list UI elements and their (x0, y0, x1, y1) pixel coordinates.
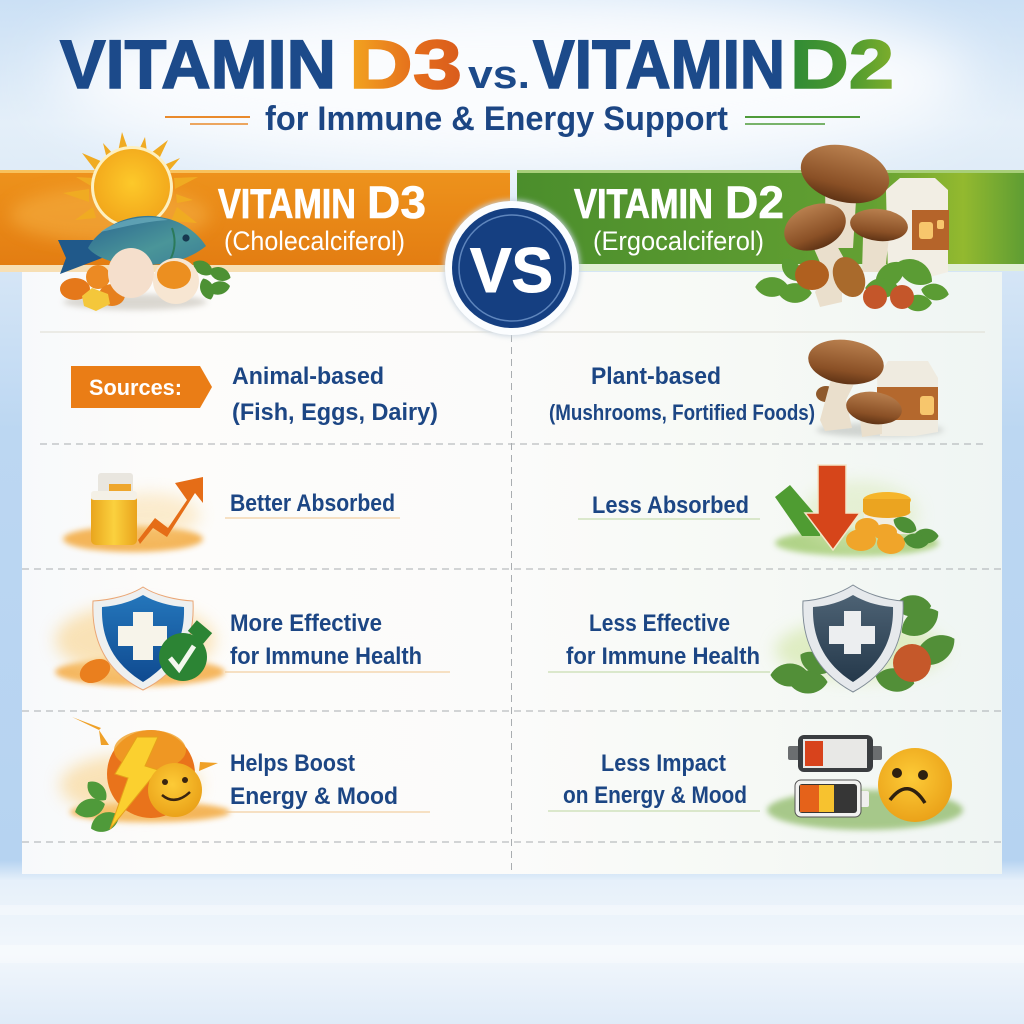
icon: mushrooms and bottle (805, 335, 944, 437)
heading: vitamin D2: VITAMIN (574, 180, 713, 227)
heading: vitamin D3 (218, 177, 426, 256)
icon: grey shield with leaves (770, 585, 961, 695)
sources tag: Sources: (89, 375, 182, 400)
panel: comparison table (22, 272, 1002, 874)
text: helps boost: Helps Boost (230, 750, 355, 777)
heading: vitamin D3: VITAMIN (218, 180, 356, 227)
icon: fish, eggs and leaves (58, 216, 233, 311)
text: more effective: More Effective (230, 610, 382, 637)
heading: vitamin D2 (574, 177, 784, 256)
text: D3 sources: (Fish, Eggs, Dairy) (232, 399, 438, 426)
text: less effective (548, 610, 770, 672)
heading: vitamin D3: (Cholecalciferol) (224, 226, 405, 256)
banner: vitamin D2 (517, 170, 1024, 271)
heading: vitamin D2: (Ergocalciferol) (593, 226, 764, 256)
text: helps boost: Energy & Mood (230, 783, 398, 810)
icon: sun (63, 132, 198, 228)
vs badge: VS (470, 236, 553, 306)
title: vs. (468, 53, 530, 97)
text: D2 sources: (Mushrooms, Fortified Foods) (549, 400, 815, 425)
text: less effective: for Immune Health (566, 643, 760, 670)
icon: bottle with rising arrow (63, 473, 203, 552)
text: D2 sources (549, 363, 815, 425)
subtitle: for Immune & Energy Support (265, 100, 728, 138)
text: less impact: Less Impact (601, 750, 726, 777)
vs badge (444, 200, 580, 336)
text: more effective: for Immune Health (230, 643, 422, 670)
heading: vitamin D2: D2 (725, 177, 784, 228)
title: VITAMIN (533, 26, 785, 103)
icon: batteries and sad face (767, 735, 963, 830)
icon: down arrow with pills (775, 465, 939, 556)
icon: blue shield with check (55, 587, 225, 690)
text: better absorbed: Better Absorbed (230, 490, 395, 517)
text: less impact: on Energy & Mood (563, 782, 747, 809)
title: D3 (349, 26, 462, 103)
sources tag (71, 366, 212, 408)
icon: energy bolt with smile (60, 717, 230, 837)
text: D3 sources (232, 363, 438, 426)
icon: mushrooms, supplement bottle and leaves (755, 136, 950, 311)
text: D3 sources: Animal-based (232, 363, 384, 390)
title: D2 (790, 26, 894, 103)
heading: vitamin D3: D3 (367, 177, 426, 228)
text: D2 sources: Plant-based (591, 363, 721, 390)
text: less absorbed: Less Absorbed (592, 492, 749, 519)
title: VITAMIN (60, 26, 336, 103)
banner: vitamin D3 (0, 170, 510, 272)
text: helps boost (225, 750, 430, 812)
text: less effective: Less Effective (589, 610, 730, 637)
text: less impact (548, 750, 760, 811)
text: more effective (225, 610, 450, 672)
title (60, 26, 894, 103)
